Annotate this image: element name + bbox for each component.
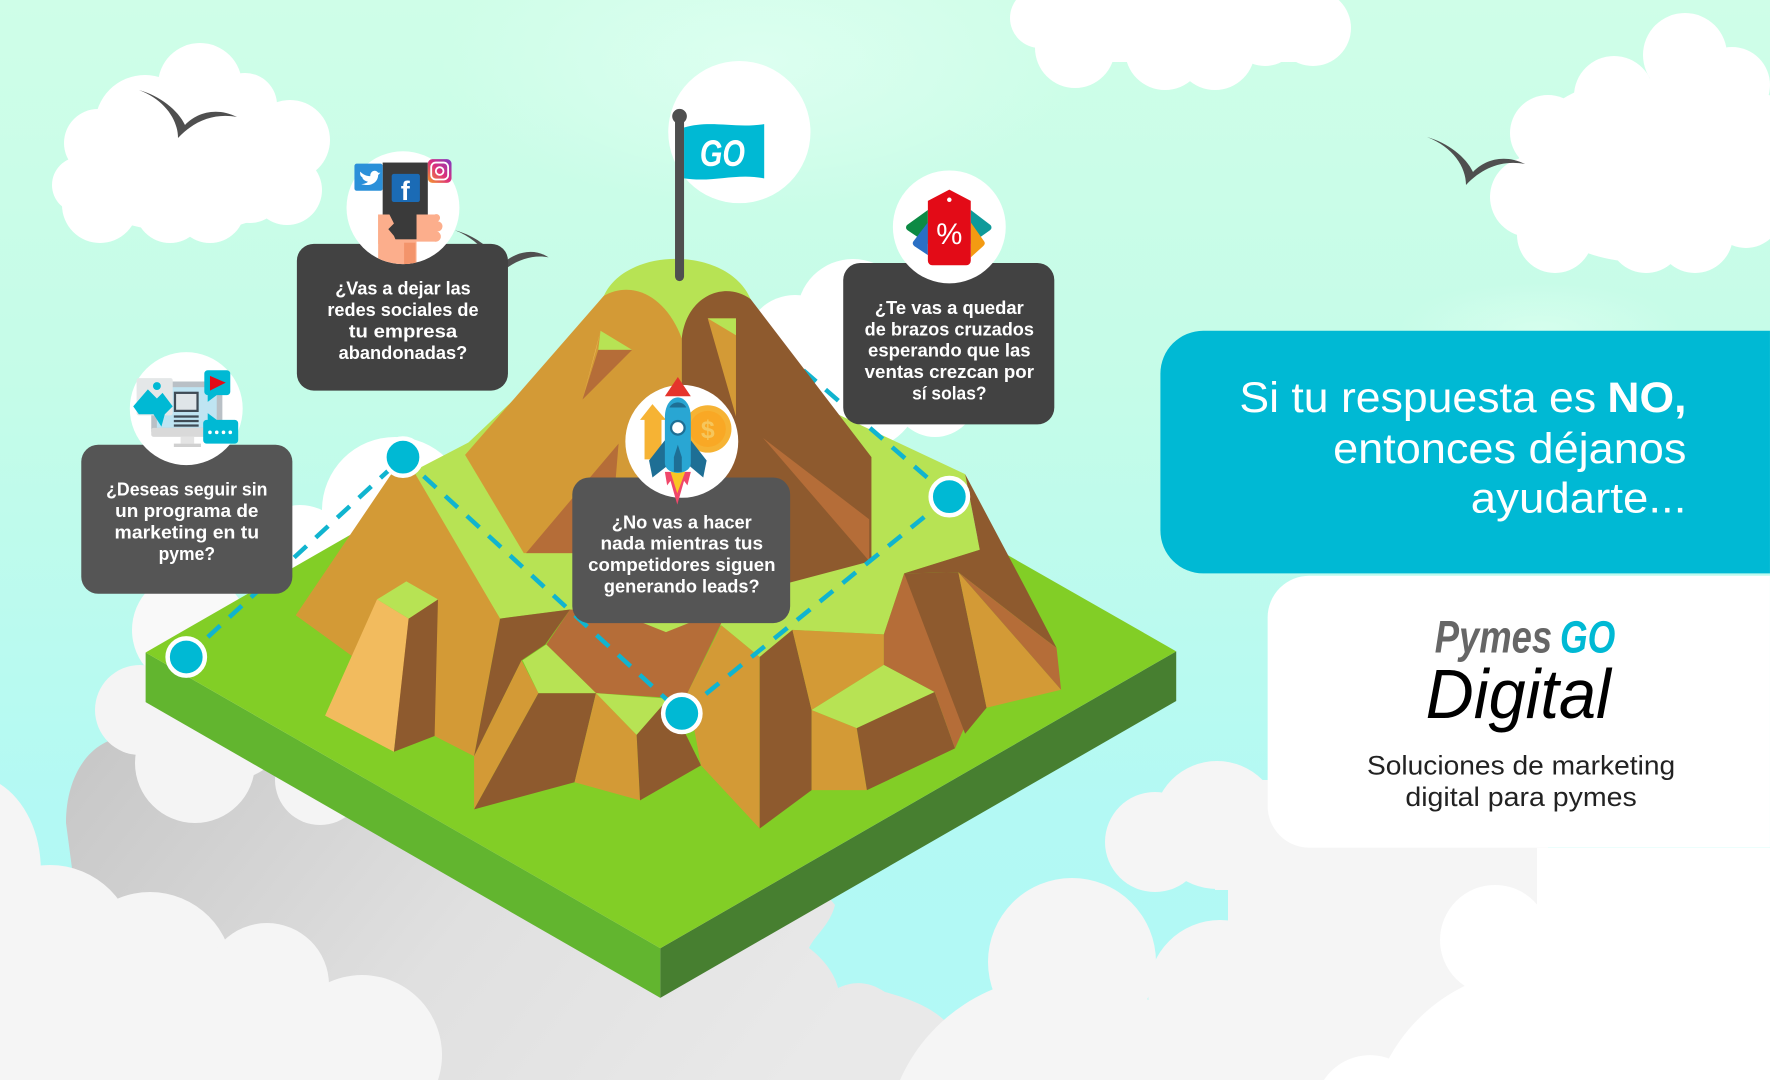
flag label: GO bbox=[700, 132, 745, 174]
logo: Digital bbox=[1426, 655, 1613, 733]
logo bbox=[1426, 611, 1615, 733]
card text: abandonadas? bbox=[339, 342, 467, 363]
icon: instagram bbox=[428, 159, 452, 183]
card text: esperando que las bbox=[868, 340, 1031, 361]
tagline bbox=[1367, 749, 1675, 812]
icon circle bbox=[347, 151, 459, 264]
cloud: top right bbox=[1490, 13, 1770, 273]
heading text: Si tu respuesta es bbox=[1239, 374, 1596, 422]
small facet bbox=[582, 331, 632, 400]
centre lighter basin bbox=[546, 610, 721, 698]
card text bbox=[588, 511, 775, 597]
mountain bbox=[296, 259, 1061, 829]
cloud: bottom right white bbox=[1324, 848, 1770, 1080]
back left wedge bbox=[526, 444, 619, 553]
card text: ¿Vas a dejar las bbox=[335, 278, 471, 299]
icon: rocket with coin bbox=[640, 377, 731, 505]
heading text bbox=[1239, 374, 1686, 522]
tagline: Soluciones de marketing bbox=[1367, 749, 1675, 780]
flag cloth bbox=[684, 124, 764, 180]
cloud: large grey under island bbox=[66, 737, 980, 1080]
card text: sí solas? bbox=[912, 383, 987, 404]
card text: redes sociales de bbox=[327, 299, 479, 320]
card text: ¿Te vas a quedar bbox=[875, 297, 1024, 318]
card box bbox=[843, 263, 1054, 424]
cloud: top centre bbox=[1010, 0, 1351, 90]
flag bbox=[668, 61, 810, 281]
question card: ventas bbox=[843, 170, 1054, 424]
route node 4 bbox=[931, 478, 968, 515]
front blocks bbox=[474, 645, 701, 809]
icon circle bbox=[893, 170, 1006, 283]
route node 2 bbox=[384, 439, 422, 476]
card text: generando leads? bbox=[604, 576, 760, 597]
icon: monitor with media bbox=[133, 370, 238, 447]
card text: ventas crezcan por bbox=[865, 361, 1034, 382]
back right peak bbox=[677, 291, 871, 582]
heading text: entonces déjanos bbox=[1333, 425, 1686, 473]
bird: top right bbox=[1427, 137, 1525, 185]
dashed route bbox=[186, 457, 949, 713]
icon circle bbox=[130, 352, 243, 465]
bird: behind social box bbox=[455, 230, 549, 279]
question card: redes sociales bbox=[297, 151, 508, 391]
centre green patch bbox=[626, 616, 706, 632]
central pillar bbox=[687, 625, 812, 829]
right mountain bbox=[884, 474, 1061, 748]
panel background bbox=[1160, 331, 1770, 573]
panel: call to action bbox=[1160, 331, 1770, 573]
card text: tu empresa bbox=[349, 321, 458, 342]
card text bbox=[327, 278, 479, 363]
icon: price tags: % bbox=[936, 218, 962, 251]
cloud: behind right hill bbox=[745, 259, 977, 450]
right blocks bbox=[792, 630, 955, 790]
card text: ¿Deseas seguir sin bbox=[106, 479, 268, 500]
card box bbox=[81, 445, 292, 594]
back right lighter facet bbox=[763, 438, 869, 561]
question card: leads bbox=[572, 377, 790, 623]
card box bbox=[572, 477, 790, 623]
logo: Pymes bbox=[1435, 611, 1552, 662]
card text: un programa de bbox=[115, 500, 258, 521]
icon: facebook: f bbox=[401, 175, 411, 206]
icon: price tags bbox=[906, 190, 991, 265]
cloud: behind left hill bbox=[250, 437, 468, 605]
cloud: top left bbox=[52, 43, 330, 243]
icon: hand holding phone bbox=[378, 163, 443, 271]
bird: top left bbox=[139, 90, 237, 138]
icon: twitter bbox=[354, 164, 383, 191]
dashed route: back section bbox=[790, 359, 949, 497]
flag backing circle bbox=[668, 61, 810, 203]
cloud: bottom right foreground bbox=[900, 761, 1548, 1080]
icon: rocket with coin: $ bbox=[701, 417, 715, 444]
card text: de brazos cruzados bbox=[865, 318, 1034, 339]
heading text: NO, bbox=[1607, 374, 1686, 422]
pillar bbox=[325, 581, 438, 752]
tagline: digital para pymes bbox=[1405, 781, 1637, 812]
hill light green base bbox=[412, 259, 980, 657]
card text: pyme? bbox=[159, 543, 215, 564]
card box bbox=[297, 244, 508, 391]
question card: programa de marketing bbox=[81, 352, 292, 594]
card text: marketing en tu bbox=[115, 521, 259, 542]
panel background bbox=[1268, 576, 1770, 848]
centre dark face bbox=[474, 610, 570, 756]
flag pole bbox=[675, 117, 684, 281]
route node 3 bbox=[663, 695, 700, 732]
cloud: bottom left foreground bbox=[0, 784, 442, 1080]
icon: facebook bbox=[392, 174, 420, 206]
card text: competidores siguen bbox=[588, 554, 775, 575]
logo: GO bbox=[1560, 611, 1615, 662]
card text: ¿No vas a hacer bbox=[612, 511, 752, 532]
island platform bbox=[146, 357, 1176, 998]
icon circle bbox=[625, 385, 738, 498]
route node 1 bbox=[168, 638, 205, 676]
heading text: ayudarte... bbox=[1471, 474, 1686, 522]
card text: nada mientras tus bbox=[601, 533, 763, 554]
panel: brand bbox=[1268, 576, 1770, 848]
card text bbox=[865, 297, 1034, 404]
back right tan strip bbox=[708, 318, 736, 417]
back left peak bbox=[465, 290, 682, 553]
left foreground mountain bbox=[296, 468, 500, 756]
cloud: left behind island bbox=[95, 572, 365, 825]
card text bbox=[106, 479, 268, 564]
pole ball bbox=[672, 109, 687, 124]
